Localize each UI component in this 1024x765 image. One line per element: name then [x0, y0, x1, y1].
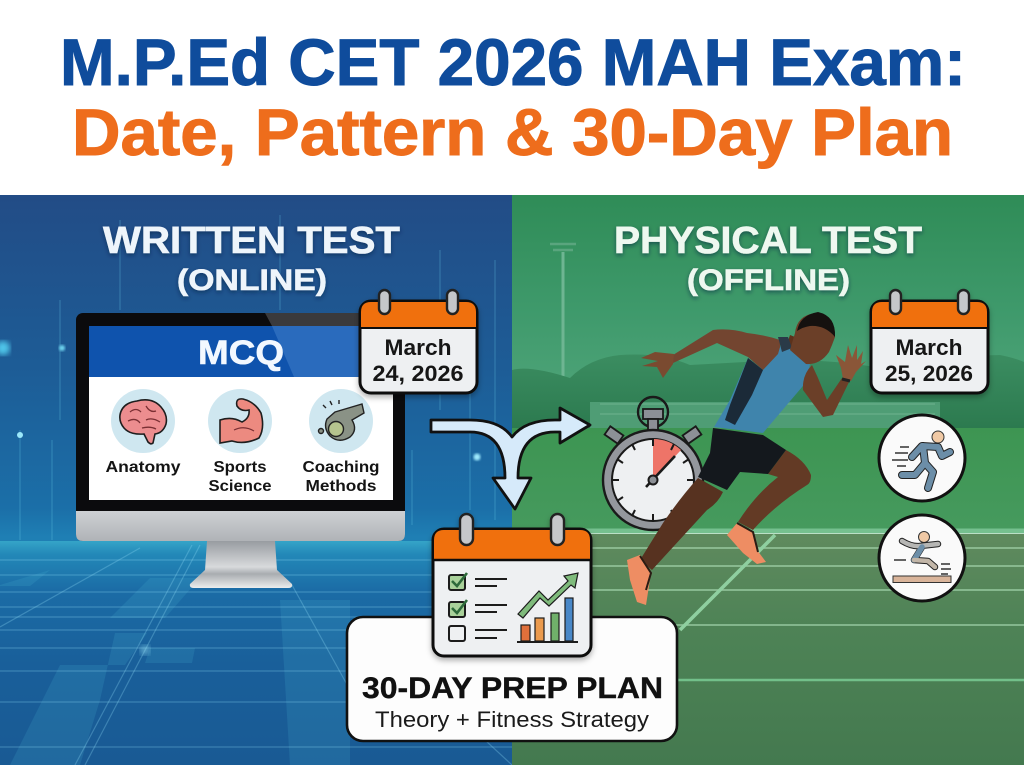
icon: flexed arm: [220, 399, 263, 443]
icon: brain: [120, 400, 166, 444]
front leg: [738, 450, 811, 530]
growth chart: [517, 573, 578, 642]
heading: written test: WRITTEN TEST: [103, 220, 400, 262]
back hand: [641, 352, 674, 378]
athlete: [627, 312, 866, 605]
MCQ header: [89, 326, 393, 377]
panel: written test background: [0, 195, 512, 765]
checklist: [449, 573, 507, 641]
icon: whistle: [318, 400, 364, 440]
floodlight: [562, 252, 564, 400]
jersey: [714, 337, 810, 433]
subject: sports science: [208, 389, 272, 495]
icon: running person: [879, 415, 965, 501]
arrow: split to physical test and prep plan: [431, 408, 590, 509]
back leg: [640, 478, 723, 570]
plan heading: 30-DAY PREP PLAN: [362, 672, 663, 705]
neck: [785, 335, 815, 365]
calendar: March 24, 2026: 24, 2026: [372, 361, 464, 386]
head: [790, 313, 835, 364]
front hand: [836, 345, 866, 381]
calendar: March 25, 2026: 25, 2026: [885, 361, 973, 386]
heading: physical test: [614, 220, 922, 297]
panel: physical test background: [512, 195, 1024, 765]
heading: written test: [103, 220, 400, 297]
calendar: March 24, 2026: March: [384, 335, 452, 360]
monitor: [76, 313, 405, 588]
calendar: plan checklist and chart: [433, 514, 591, 656]
title line 1: M.P.Ed CET 2026 MAH Exam:: [60, 25, 966, 99]
page background: [0, 0, 1024, 195]
subject: coaching methods: Methods: [306, 478, 377, 495]
front shoe: [727, 523, 766, 564]
monitor stand: [190, 541, 292, 588]
back shoe: [627, 555, 651, 605]
plan subheading: Theory + Fitness Strategy: [375, 707, 649, 732]
icon: stopwatch: [603, 397, 703, 530]
monitor screen: [89, 326, 393, 500]
subject: coaching methods: [302, 389, 380, 495]
icon: long jump person: [879, 515, 965, 601]
panel: 30-day prep plan: [347, 617, 677, 741]
monitor body: [76, 313, 405, 541]
calendar: March 25, 2026: [871, 290, 988, 393]
heading: physical test: (OFFLINE): [687, 264, 850, 297]
subject: sports science: Sports: [214, 459, 267, 476]
front arm: [803, 365, 850, 417]
subject: coaching methods: Coaching: [302, 459, 380, 476]
MCQ header: MCQ: [198, 334, 284, 372]
calendar: March 24, 2026: [360, 290, 477, 393]
subject: anatomy: [106, 389, 181, 476]
title line 2: Date, Pattern & 30-Day Plan: [72, 95, 953, 169]
subject: sports science: Science: [208, 478, 272, 495]
heading: written test: (ONLINE): [177, 264, 327, 297]
back arm: [673, 329, 780, 370]
shorts: [698, 428, 786, 490]
calendar: March 25, 2026: March: [896, 335, 962, 360]
title: [60, 25, 966, 169]
subject: anatomy: Anatomy: [106, 459, 181, 476]
heading: physical test: PHYSICAL TEST: [614, 220, 922, 262]
